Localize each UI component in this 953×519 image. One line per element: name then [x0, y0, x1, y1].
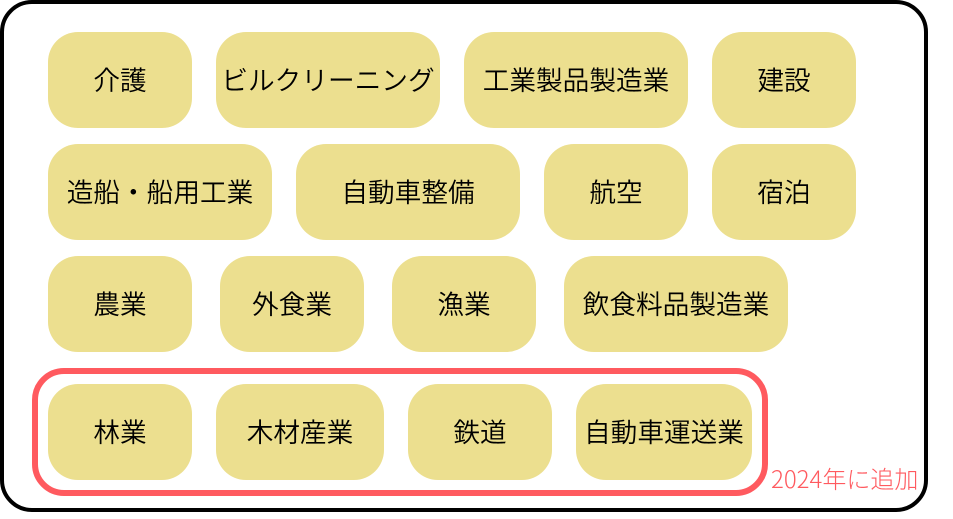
pill: 宿泊 — [712, 144, 856, 240]
pill: ビルクリーニング: ビルクリーニング — [221, 59, 435, 98]
pill: 造船・船用工業 — [48, 144, 272, 240]
pill: 工業製品製造業 — [464, 32, 688, 128]
pill: 鉄道: 鉄道 — [453, 411, 507, 450]
pill: 飲食料品製造業: 飲食料品製造業 — [583, 283, 769, 322]
pill: 林業 — [48, 384, 192, 480]
pill: 介護: 介護 — [93, 59, 147, 98]
pill: 自動車運送業 — [576, 384, 752, 480]
pill: 介護 — [48, 32, 192, 128]
pill: 建設: 建設 — [757, 59, 811, 98]
pill: 漁業: 漁業 — [437, 283, 491, 322]
pill: 木材産業: 木材産業 — [247, 411, 353, 450]
pill: ビルクリーニング — [216, 32, 440, 128]
pill: 自動車整備 — [296, 144, 520, 240]
pill: 航空: 航空 — [589, 171, 643, 210]
pill: 工業製品製造業: 工業製品製造業 — [483, 59, 669, 98]
pill: 飲食料品製造業 — [564, 256, 788, 352]
pill: 自動車整備: 自動車整備 — [341, 171, 475, 210]
label: 2024年に追加: 2024年に追加 — [771, 460, 918, 495]
pill: 農業: 農業 — [93, 283, 147, 322]
pill: 宿泊: 宿泊 — [757, 171, 811, 210]
pill: 漁業 — [392, 256, 536, 352]
pill: 外食業 — [220, 256, 364, 352]
pill: 建設 — [712, 32, 856, 128]
pill: 木材産業 — [216, 384, 384, 480]
pill: 造船・船用工業: 造船・船用工業 — [67, 171, 253, 210]
highlight frame: 2024 additions — [32, 368, 768, 496]
pill: 自動車運送業: 自動車運送業 — [584, 411, 744, 450]
pill: 航空 — [544, 144, 688, 240]
pill: 農業 — [48, 256, 192, 352]
pill: 林業: 林業 — [93, 411, 147, 450]
pill: 外食業: 外食業 — [252, 283, 332, 322]
pill: 鉄道 — [408, 384, 552, 480]
